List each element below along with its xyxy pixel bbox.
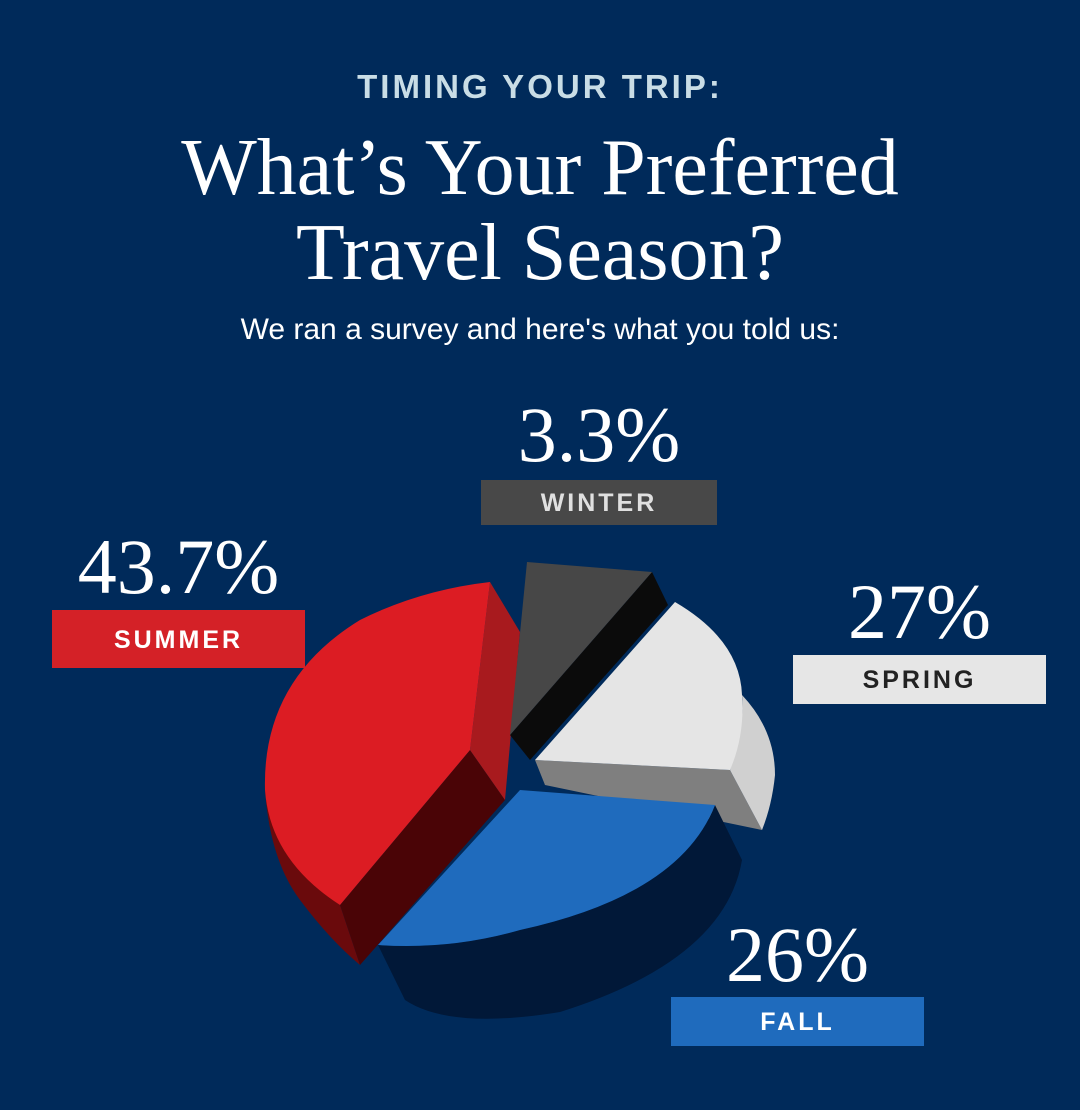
slice: winter — [510, 562, 668, 760]
kicker: TIMING YOUR TRIP: — [357, 68, 723, 105]
label: spring: SPRING — [863, 666, 976, 694]
title: What’s Your Preferred — [181, 124, 899, 212]
slice: summer — [265, 582, 520, 965]
label: spring — [793, 568, 1046, 704]
label: fall: FALL — [760, 1008, 835, 1036]
title: Travel Season? — [296, 209, 784, 297]
title — [181, 124, 899, 297]
slice: spring — [535, 602, 775, 830]
label: winter — [481, 391, 717, 525]
label: summer — [52, 523, 305, 668]
label: spring: 27% — [848, 568, 991, 655]
label: summer: SUMMER — [114, 626, 243, 654]
label: summer: 43.7% — [78, 523, 279, 610]
label: winter: 3.3% — [518, 391, 680, 478]
subtitle: We ran a survey and here's what you told us: — [241, 313, 839, 346]
slice: fall — [378, 790, 742, 1019]
label: winter: WINTER — [541, 489, 657, 517]
label: fall: 26% — [726, 911, 869, 998]
label: fall — [671, 911, 924, 1046]
